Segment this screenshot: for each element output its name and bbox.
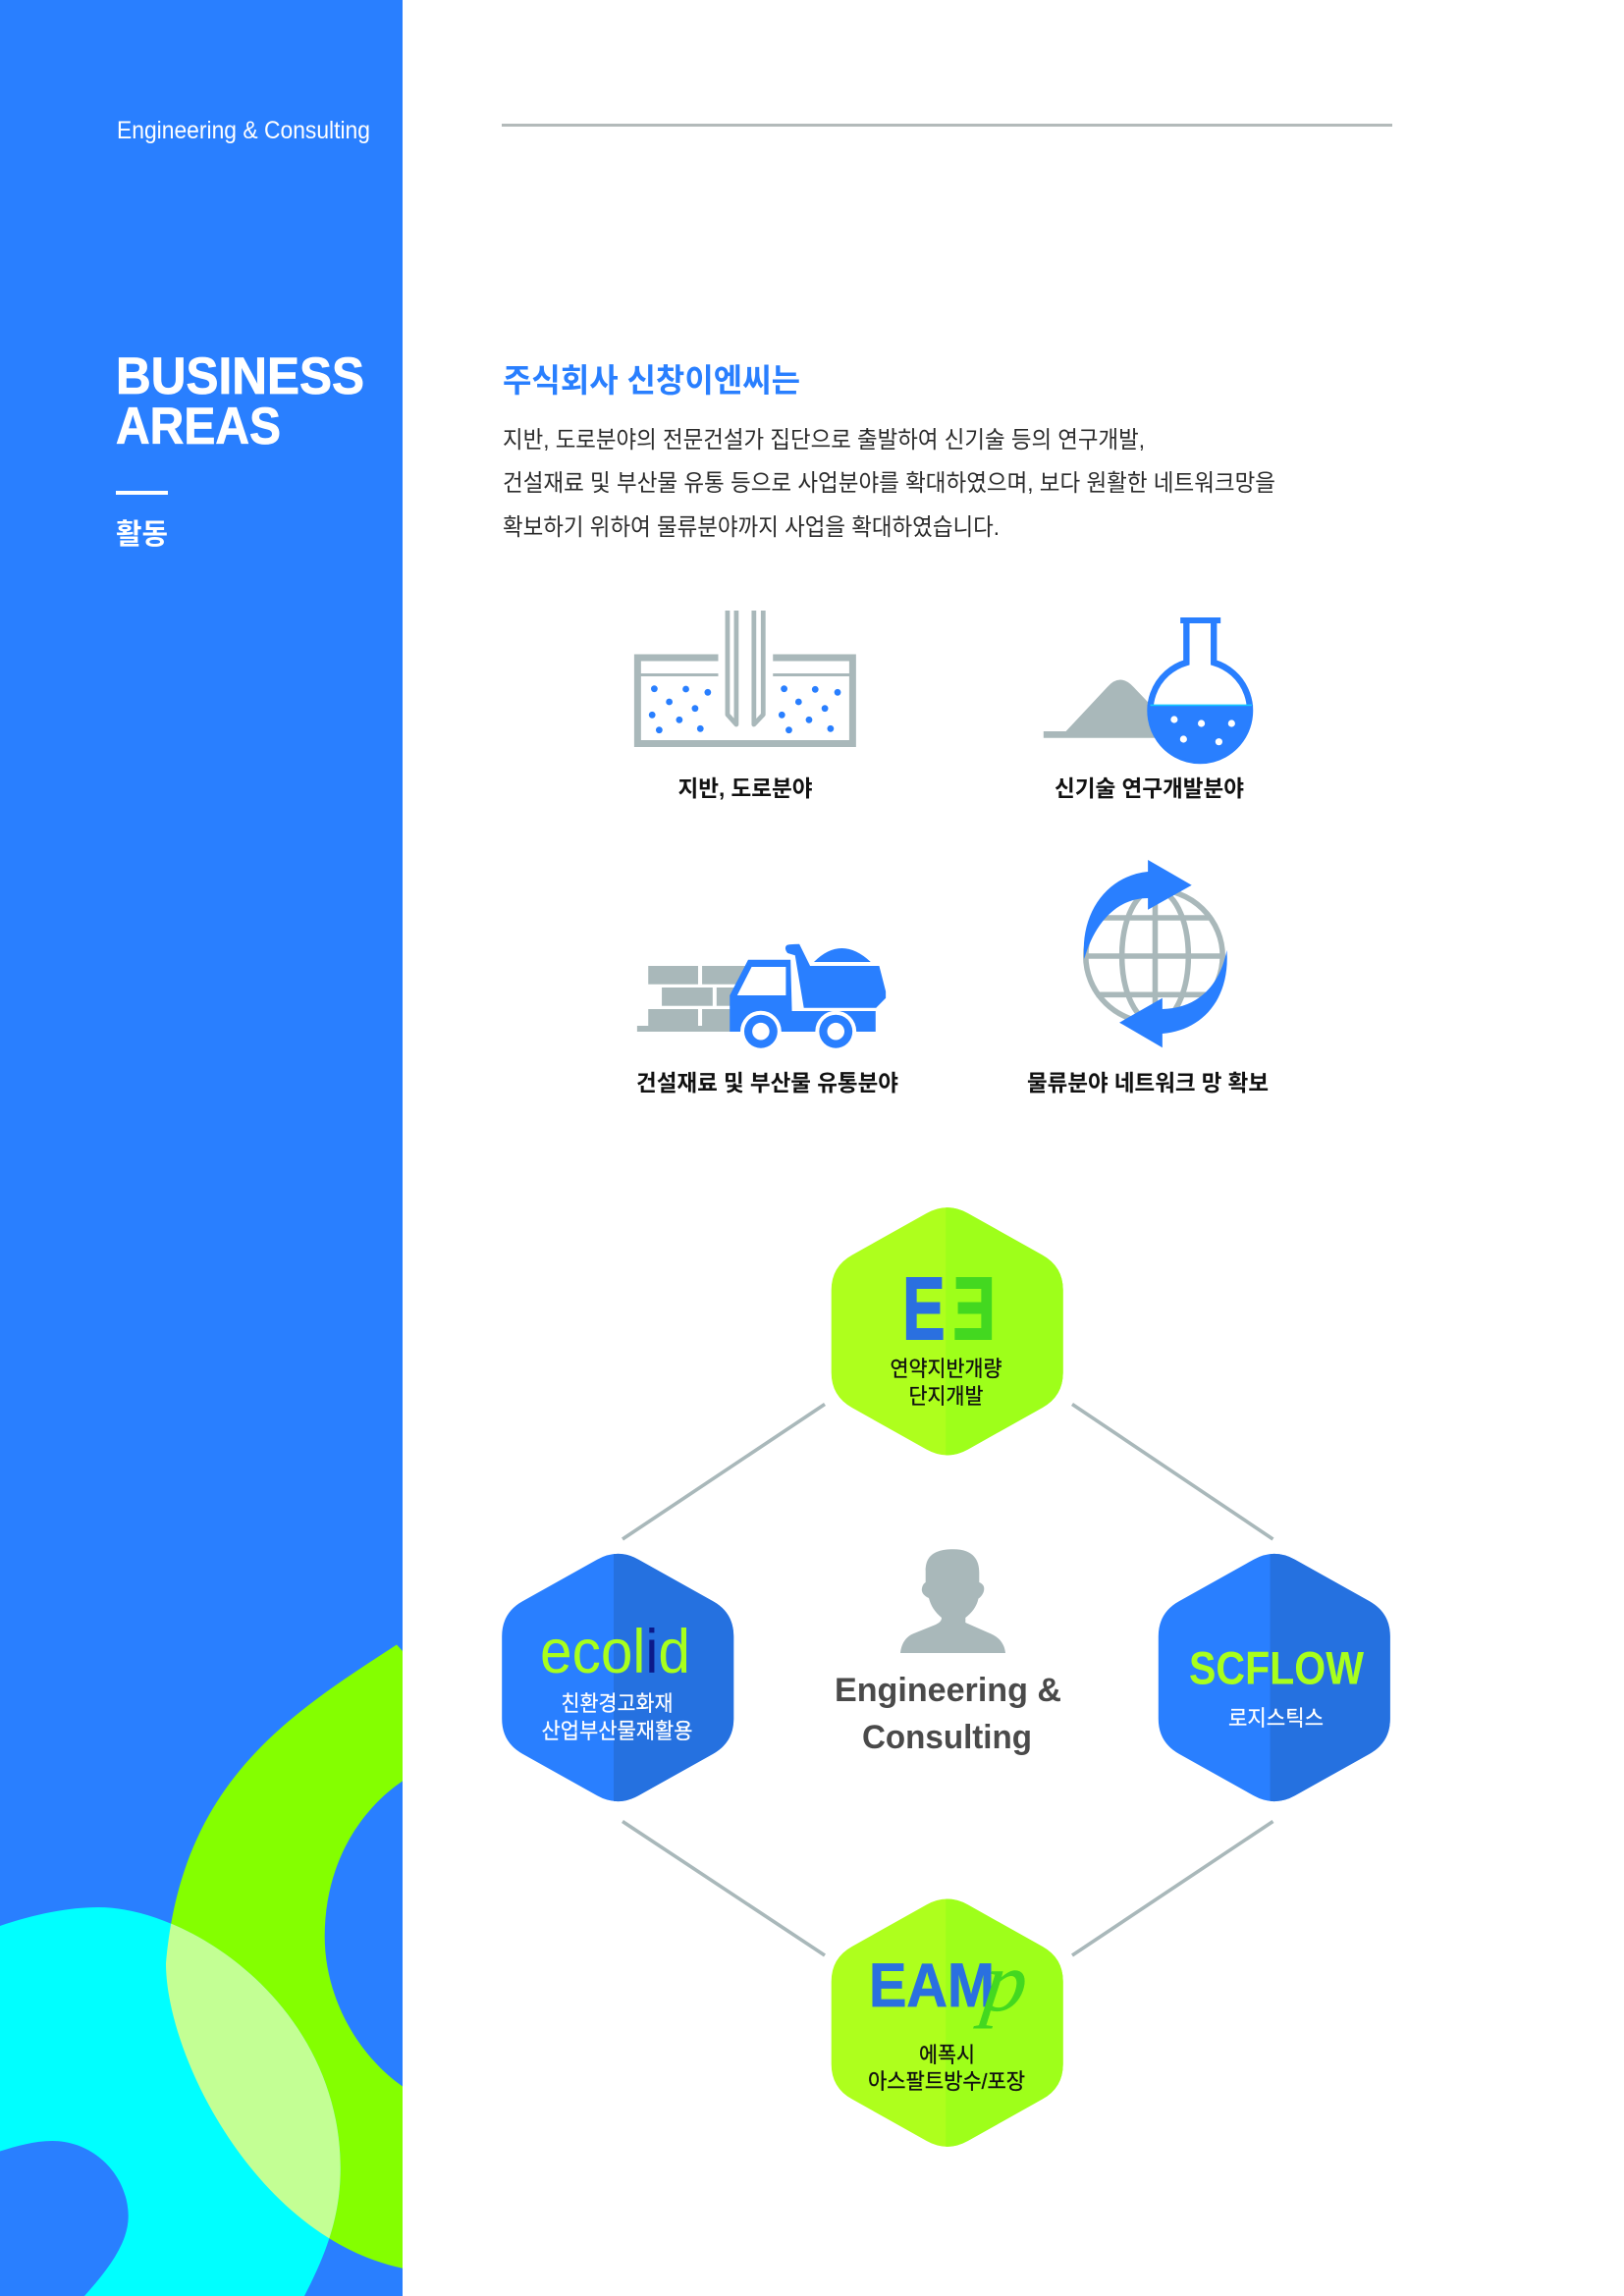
logo: E3: E xyxy=(902,1259,946,1359)
caption: Consulting xyxy=(862,1719,1032,1756)
intro text block: 건설재료 및 부산물 유통 등으로 사업분야를 확대하였으며, 보다 원활한 네트워크망을 xyxy=(503,470,1275,497)
intro text block: 지반, 도로분야의 전문건설가 집단으로 출발하여 신기술 등의 연구개발, xyxy=(503,427,1145,454)
label: ground and roads: 지반, 도로분야 xyxy=(677,775,813,801)
sidebar tagline: Engineering & Consulting xyxy=(117,117,370,144)
hexagon text xyxy=(890,1357,1001,1409)
hexagon text: 친환경고화재 xyxy=(562,1691,674,1716)
hexagon text: 에폭시 xyxy=(919,2043,975,2067)
hexagon text: 아스팔트방수/포장 xyxy=(868,2069,1025,2094)
logo: EAMp: EAM xyxy=(869,1951,995,2020)
hexagon text: 연약지반개량 xyxy=(890,1357,1001,1381)
sidebar title: AREAS xyxy=(116,398,281,455)
sidebar title: BUSINESS xyxy=(116,347,364,405)
intro text block: 확보하기 위하여 물류분야까지 사업을 확대하였습니다. xyxy=(503,514,1000,541)
caption xyxy=(835,1672,1061,1756)
intro text block xyxy=(503,427,1275,541)
panel: blue sidebar xyxy=(0,0,403,2296)
icon: globe with arrows xyxy=(1084,860,1227,1047)
icon: dump truck and bricks xyxy=(637,944,886,1052)
logo: ecolid: ecolid xyxy=(540,1618,690,1686)
sidebar background xyxy=(0,0,403,2296)
logo: EAMp xyxy=(869,1935,1034,2029)
logo: E3: E xyxy=(952,1259,996,1359)
sidebar title xyxy=(116,347,364,455)
top rule xyxy=(502,124,1392,127)
hexagon: SCFLOW xyxy=(1159,1554,1390,1801)
heading: 주식회사 신창이엔씨는 xyxy=(503,362,800,399)
caption: Engineering & xyxy=(835,1672,1061,1709)
hexagon text xyxy=(542,1691,693,1743)
hexagon text: 산업부산물재활용 xyxy=(542,1719,693,1743)
hexagon: ecolid xyxy=(502,1554,733,1801)
logo: E3 xyxy=(902,1259,996,1359)
hexagon text: 단지개발 xyxy=(909,1384,984,1409)
hexagon text: 로지스틱스 xyxy=(1228,1706,1324,1731)
hexagon: EAMp xyxy=(832,1899,1063,2147)
decorative cyan ring xyxy=(0,1907,341,2296)
icon: flask and hill xyxy=(1044,617,1253,761)
label: logistics network: 물류분야 네트워크 망 확보 xyxy=(1027,1070,1269,1095)
center person with caption xyxy=(835,1549,1061,1756)
ring overlap xyxy=(166,1924,341,2238)
icon: ground piles xyxy=(637,611,853,744)
logo: EAMp: p xyxy=(972,1935,1034,2029)
sidebar subtitle: 활동 xyxy=(116,518,168,551)
label: new technology research: 신기술 연구개발분야 xyxy=(1055,775,1244,801)
hexagon text xyxy=(868,2043,1025,2094)
icon: person silhouette xyxy=(900,1549,1005,1653)
label: materials distribution: 건설재료 및 부산물 유통분야 xyxy=(636,1070,898,1095)
decorative green ring xyxy=(166,1645,403,2269)
diagram connector lines xyxy=(623,1404,1272,1955)
sidebar divider xyxy=(116,491,168,495)
logo: SCFLOW: SCFLOW xyxy=(1189,1641,1365,1694)
hexagon: E3 soft ground improvement xyxy=(832,1207,1063,1455)
